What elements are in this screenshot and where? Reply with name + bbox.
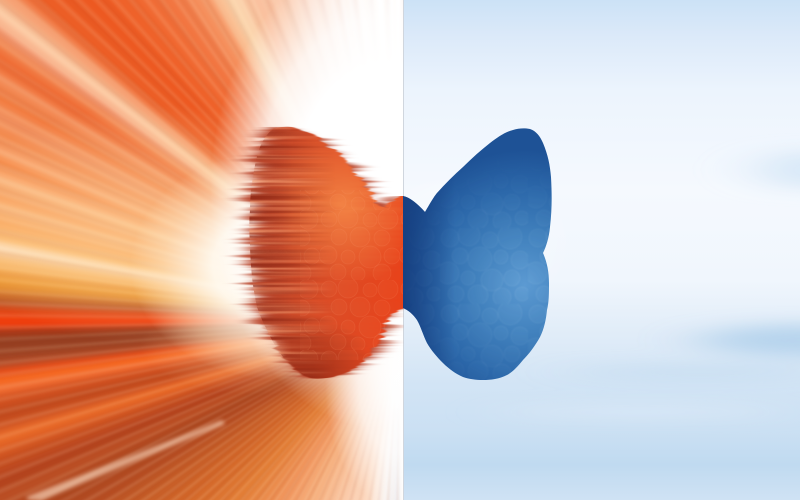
main red body (249, 127, 410, 379)
pale diagonal streak (24, 418, 226, 500)
red lobe streak and cell texture (249, 127, 403, 374)
center divider line (403, 0, 404, 500)
blurred streaky outer edge (249, 127, 410, 379)
right lobe: blue thyroid (403, 128, 552, 380)
panel: right cool blue background (403, 0, 800, 500)
panel: left fiery background with radiating light rays (0, 0, 403, 500)
left lobe: red motion-blurred thyroid (225, 126, 404, 379)
butterfly illustration (225, 126, 552, 380)
